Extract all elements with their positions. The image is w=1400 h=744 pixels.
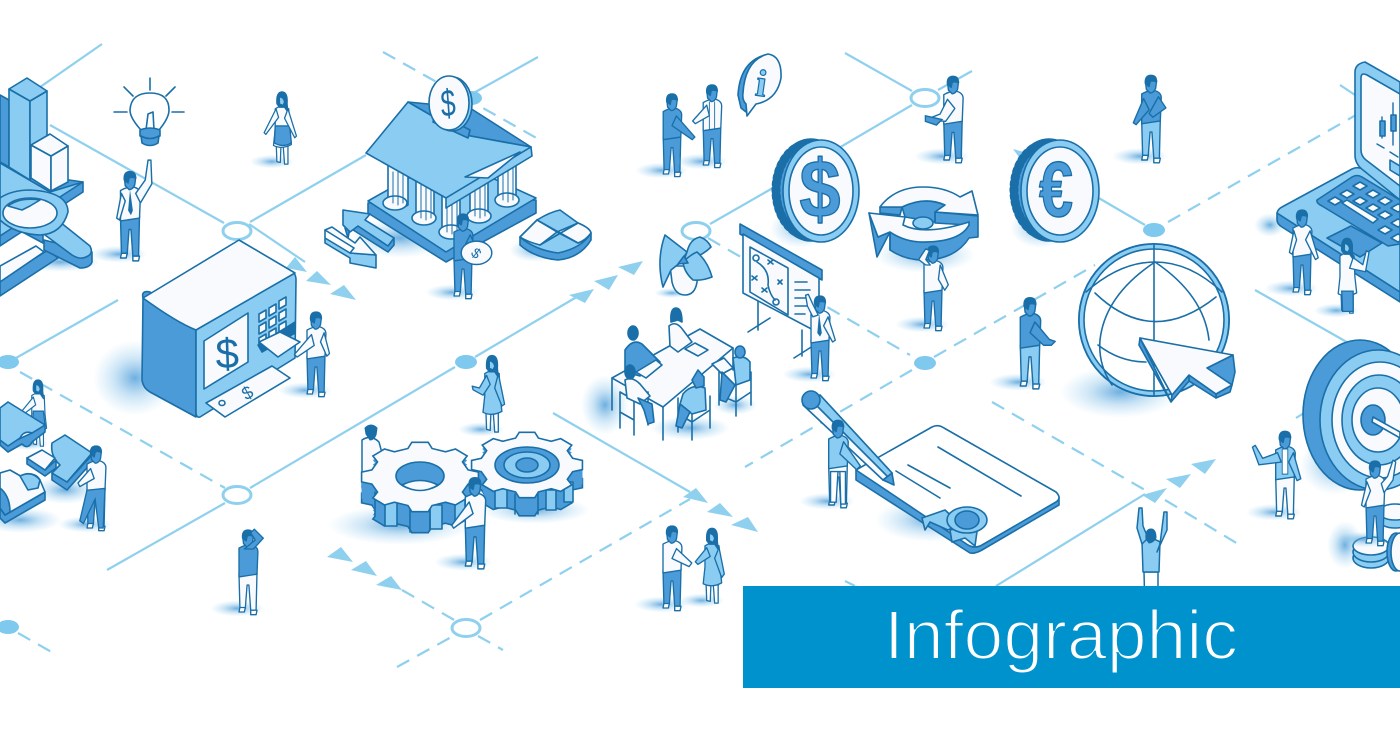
person: man carrying coin: $	[467, 245, 484, 263]
person: man carrying coin	[425, 214, 492, 300]
icon: gears	[328, 432, 590, 545]
person: man hands on head left	[210, 529, 264, 616]
icon: shield	[509, 210, 591, 262]
title banner	[743, 586, 1400, 688]
person: woman shaking hands lower	[679, 528, 724, 608]
person: man at ATM	[278, 312, 332, 398]
person: man in dark sweater	[1112, 75, 1168, 165]
person: man with raised hand	[675, 85, 728, 169]
person: man holding pencil	[799, 420, 860, 510]
icon: globe with cursor	[1060, 244, 1235, 418]
person: man with tablet	[914, 76, 970, 165]
person: man at laptop	[1264, 210, 1318, 296]
person: woman at laptop	[1314, 238, 1369, 318]
icon: swap arrows	[325, 210, 394, 268]
icon: bank building with coin: $	[439, 80, 457, 125]
person: man shaking hands, info side	[635, 94, 695, 178]
person: man pushing gear	[434, 478, 492, 571]
person: man shaking hands lower	[634, 526, 692, 612]
icon: info speech bubble: i	[753, 62, 770, 105]
meeting table with people	[581, 308, 757, 440]
person: man with arms raised	[1137, 508, 1167, 612]
icon: large pencil	[802, 391, 894, 485]
icon: signed document with seal	[856, 426, 1059, 553]
person: presenter at board	[782, 294, 836, 382]
icon: dollar coin	[770, 139, 859, 248]
icon: ATM machine: $	[215, 330, 240, 377]
banner title text: Infographic	[884, 596, 1238, 674]
icon: jigsaw puzzle	[0, 402, 99, 533]
icon: euro coin: €	[1039, 145, 1073, 233]
connector nodes	[0, 90, 1165, 636]
icon: stacked coins	[1327, 504, 1400, 571]
flow arrowheads	[286, 149, 1216, 590]
icon: potted plant	[654, 235, 712, 298]
person: woman in light dress	[458, 356, 505, 437]
icon: bank building with coin	[350, 76, 536, 262]
icon: laptop	[1254, 62, 1400, 302]
person: man carrying puzzle piece	[58, 446, 112, 532]
icon: euro coin	[1010, 139, 1099, 248]
icon: bar chart with magnifier	[0, 78, 100, 296]
icon: dollar coin: $	[799, 145, 841, 235]
person: man hands on head	[895, 246, 949, 332]
icon: light bulb	[114, 78, 184, 146]
person: man at board and globe	[989, 298, 1055, 391]
person: woman standing at puzzle top	[8, 380, 49, 450]
icon: target with dart	[1300, 340, 1400, 495]
icon: ATM machine: $	[238, 382, 257, 404]
person: walking woman	[250, 92, 296, 168]
person: man behind gear	[362, 425, 385, 490]
icon: info speech bubble	[738, 54, 781, 116]
person: man pointing at bulb	[90, 160, 152, 263]
icon: ATM machine	[93, 240, 300, 417]
person: man waving	[1246, 431, 1302, 521]
icon: strategy board	[740, 224, 822, 358]
icon: cycle arrows	[869, 187, 978, 273]
person: man on coins arm up	[1337, 460, 1396, 548]
